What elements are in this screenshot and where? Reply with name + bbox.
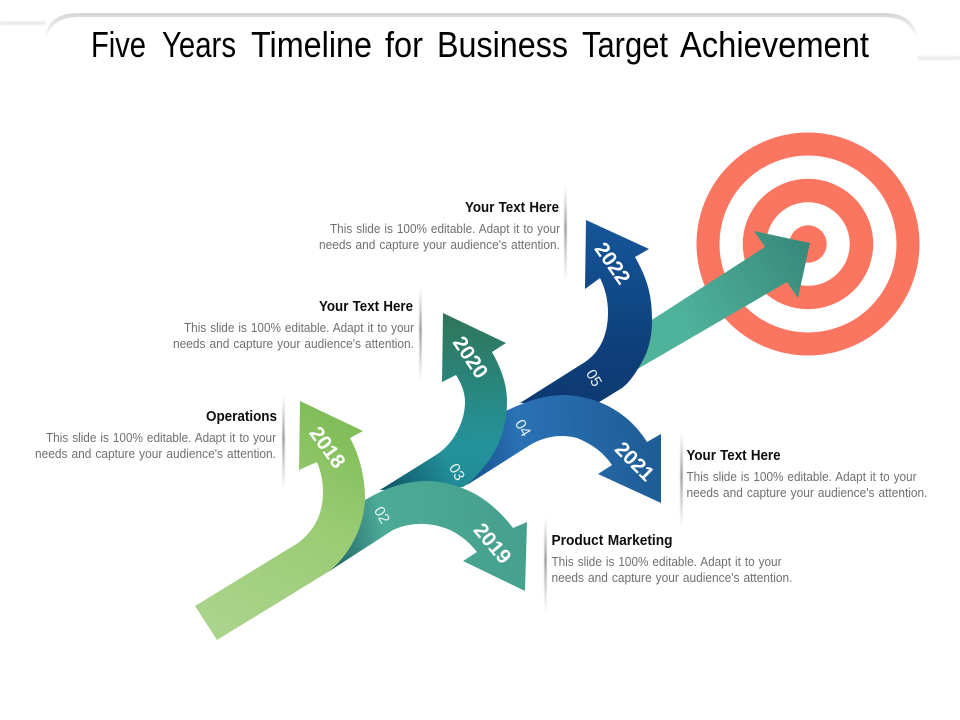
text block: operations 2018: This slide is 100% editable. Adapt it to your (46, 430, 277, 445)
arrow: 2020 (380, 313, 507, 490)
arrow: 2018: 2018 (304, 422, 350, 473)
title: for (385, 24, 423, 65)
text block: 2022 (319, 185, 566, 281)
text block: 2021: Your Text Here (686, 448, 780, 464)
icon: target (708, 144, 908, 344)
text block: 2022: Your Text Here (465, 200, 559, 216)
title: Business (437, 24, 568, 65)
text block: 2022: This slide is 100% editable. Adapt it to your (330, 221, 561, 236)
arrow: 2021: 04 (511, 417, 534, 440)
text block: 2020 (173, 287, 422, 382)
arrow: 2020: 03 (445, 461, 468, 484)
title: Years (162, 24, 236, 65)
title (91, 24, 869, 65)
arrow: 2019: 2019 (469, 519, 516, 569)
text block: 2020: Your Text Here (319, 299, 413, 315)
arrow: 2019 (328, 481, 527, 591)
arrow: final arrow hitting the target (610, 231, 810, 385)
title: Timeline (251, 24, 372, 65)
text block: 2022: needs and capture your audience's attention. (319, 237, 560, 252)
text block: product marketing 2019 (544, 517, 792, 613)
title: Achievement (680, 24, 869, 65)
text block: operations 2018 (35, 395, 284, 490)
text block: 2020: This slide is 100% editable. Adapt it to your (184, 320, 415, 335)
text block: 2021: needs and capture your audience's attention. (686, 485, 928, 500)
arrow: 2019: 02 (370, 504, 393, 527)
text block: 2020: needs and capture your audience's attention. (173, 336, 414, 351)
arrow: 2020: 2020 (448, 332, 492, 383)
arrow: 2021 (467, 395, 661, 503)
arrow: 2022: 05 (582, 367, 605, 390)
text block: operations 2018: needs and capture your audience's attention. (35, 446, 276, 461)
text block: product marketing 2019: Product Marketing (552, 533, 672, 549)
text block: 2021: This slide is 100% editable. Adapt it to your (686, 469, 917, 484)
arrow: 2021: 2021 (610, 437, 659, 486)
text block: 2021 (680, 432, 928, 528)
title: Five (91, 24, 146, 65)
text block: product marketing 2019: needs and capture your audience's attention. (552, 570, 792, 585)
text block: operations 2018: Operations (206, 409, 277, 425)
title: Target (582, 24, 668, 65)
arrow: 2022 (520, 220, 652, 404)
text block: product marketing 2019: This slide is 100% editable. Adapt it to your (552, 554, 782, 569)
arrow: 2022: 2022 (590, 238, 635, 289)
arrow: 2018 (195, 401, 365, 640)
